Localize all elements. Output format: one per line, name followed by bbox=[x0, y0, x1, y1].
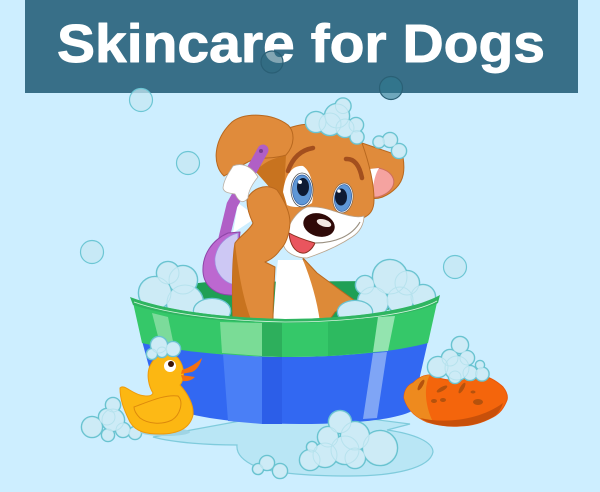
dog: chest bbox=[273, 260, 320, 322]
tub: blue lower band bbox=[142, 341, 428, 424]
floating bubbles bbox=[80, 51, 466, 278]
dog: eyebrows bbox=[288, 148, 362, 178]
foam: tub front right bbox=[338, 301, 372, 323]
title: Skincare for Dogs bbox=[57, 14, 545, 74]
foam: tub front left bbox=[194, 299, 230, 323]
dog: arm bbox=[232, 187, 290, 322]
foam: tub right back bbox=[356, 260, 435, 317]
dog: right ear bbox=[362, 143, 404, 199]
rubber duck bbox=[120, 354, 202, 436]
dog: head bbox=[258, 124, 374, 250]
dog: smile bbox=[315, 222, 360, 243]
foam: puddle front bbox=[300, 411, 397, 470]
dog: eye patch bbox=[283, 166, 313, 207]
dog: nose bbox=[301, 210, 337, 240]
tub: green upper band bbox=[132, 298, 438, 357]
foam: small puddle bbox=[253, 456, 287, 478]
duck: eye bbox=[164, 360, 176, 372]
dog: arm shadow bbox=[232, 243, 252, 322]
dog: neck shadow bbox=[256, 155, 288, 215]
tub: rim bbox=[130, 295, 440, 323]
foam: tub left back bbox=[139, 262, 203, 321]
dog: mouth bbox=[289, 233, 315, 253]
dog: inner right ear bbox=[369, 168, 394, 197]
puddle bbox=[153, 410, 433, 476]
dog bbox=[203, 115, 404, 322]
dog: white patch behind arm bbox=[233, 203, 257, 233]
tub interior back rim bbox=[160, 281, 425, 325]
dog: muzzle bbox=[283, 207, 364, 258]
dog: right leg bbox=[303, 258, 354, 322]
sponge bbox=[404, 375, 507, 426]
duck: wing bbox=[134, 396, 181, 423]
duck: beak bbox=[181, 358, 202, 381]
brush bbox=[203, 149, 263, 295]
dog: paw bbox=[223, 165, 258, 202]
foam: on head bbox=[306, 98, 364, 144]
foam: on sponge bbox=[428, 337, 488, 383]
dog: left eye bbox=[291, 173, 313, 207]
tub bbox=[130, 295, 440, 424]
foam: on duck bbox=[147, 337, 180, 359]
tub: panels and highlights bbox=[152, 313, 395, 424]
foam: left of duck bbox=[82, 398, 141, 441]
dog: left ear bbox=[216, 115, 293, 176]
foam: on ear bbox=[374, 133, 406, 158]
title banner bbox=[25, 0, 578, 93]
tub: rim highlight bbox=[134, 301, 437, 322]
dog: right eye bbox=[331, 182, 355, 214]
